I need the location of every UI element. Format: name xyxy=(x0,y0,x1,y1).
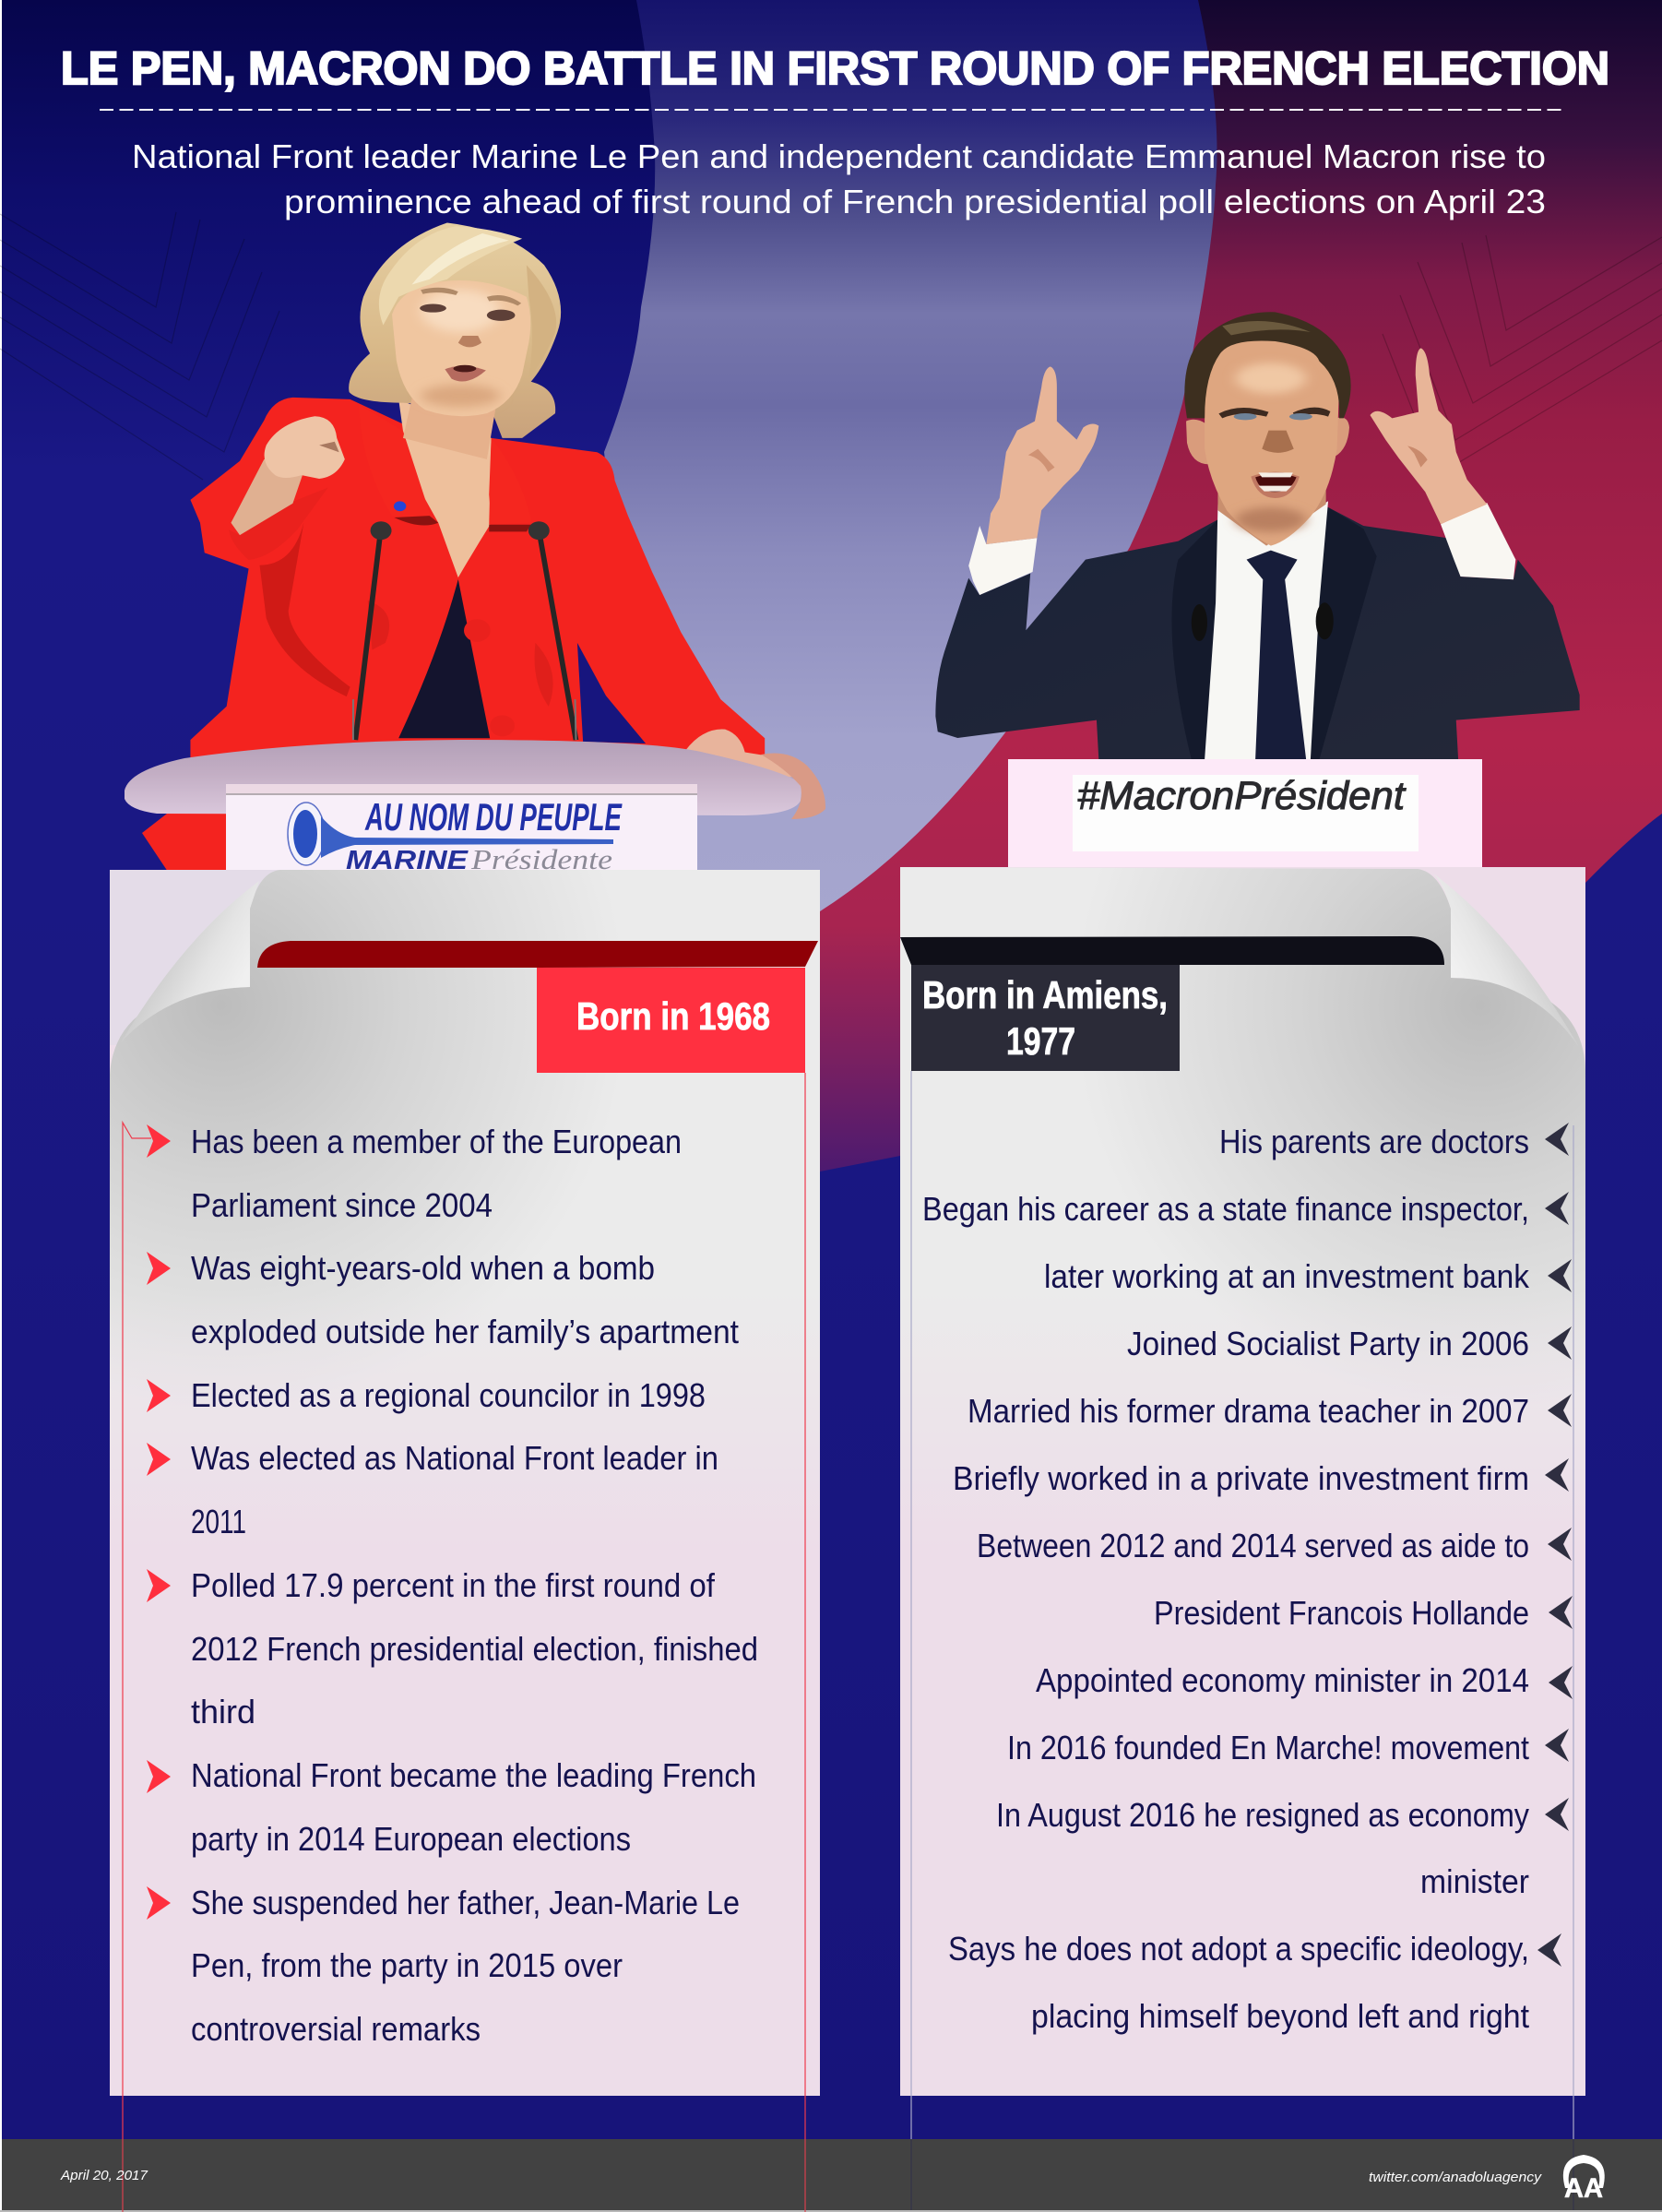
ears xyxy=(1186,418,1349,464)
biography text: In 2016 founded En Marche! movement xyxy=(1007,1729,1529,1766)
biography text: National Front became the leading French xyxy=(191,1756,756,1794)
biography text: 2012 French presidential election, finished xyxy=(191,1630,758,1668)
subtitle: prominence ahead of first round of French presidential poll elections on April 23 xyxy=(284,183,1546,220)
dark top xyxy=(398,579,490,738)
biography text: Briefly worked in a private investment firm xyxy=(953,1459,1529,1497)
biography text: third xyxy=(191,1693,255,1730)
biography text: Parliament since 2004 xyxy=(191,1186,493,1224)
biography text: Says he does not adopt a specific ideology, xyxy=(948,1930,1529,1968)
buttons xyxy=(464,619,491,642)
forearm xyxy=(231,459,303,535)
right cuff xyxy=(1441,503,1515,579)
facial features xyxy=(1218,408,1330,418)
biography text: Joined Socialist Party in 2006 xyxy=(1127,1325,1529,1362)
left hand xyxy=(986,366,1098,544)
subtitle: National Front leader Marine Le Pen and independent candidate Emmanuel Macron rise to xyxy=(132,137,1546,175)
biography text: placing himself beyond left and right xyxy=(1031,1997,1529,2035)
podium: Macron xyxy=(1008,759,1482,870)
portrait: Emmanuel Macron xyxy=(935,312,1580,760)
birthplace label xyxy=(911,965,1180,1071)
placard xyxy=(1073,775,1419,851)
biography text: Pen, from the party in 2015 over xyxy=(191,1946,623,1984)
hand on podium xyxy=(761,753,825,819)
biography text: In August 2016 he resigned as economy xyxy=(996,1796,1529,1834)
subtitle xyxy=(132,137,1546,220)
page curl xyxy=(1429,870,1579,1047)
facial features xyxy=(421,288,521,305)
lapel microphones xyxy=(1192,602,1334,641)
gap between body and sleeve xyxy=(577,643,646,743)
biography text: Was eight-years-old when a bomb xyxy=(191,1249,655,1287)
neck xyxy=(403,388,498,459)
podium slogan: AU NOM DU PEUPLE xyxy=(364,795,623,838)
jacket shadows xyxy=(260,523,350,696)
biography text: later working at an investment bank xyxy=(1044,1257,1530,1295)
panel: Macron biography xyxy=(900,867,1585,2212)
date of birth label: Born in 1968 xyxy=(576,994,770,1038)
biography text: His parents are doctors xyxy=(1219,1123,1529,1160)
biography text xyxy=(922,1123,1530,2035)
jacket xyxy=(190,398,765,777)
biography text: Between 2012 and 2014 served as aide to xyxy=(977,1527,1529,1564)
icon: Anadolu Agency logo: AA xyxy=(1564,2173,1603,2204)
guide lines xyxy=(123,1123,151,2212)
portrait: Marine Le Pen xyxy=(190,222,800,777)
biography text: Has been a member of the European xyxy=(191,1123,682,1160)
bullet arrows xyxy=(1537,1123,1573,1967)
biography text: 2011 xyxy=(191,1503,246,1540)
podium name: MARINE xyxy=(346,846,469,875)
date of birth label xyxy=(537,968,805,1073)
ribbon fold xyxy=(257,941,818,968)
neck xyxy=(1217,486,1326,546)
footer bar xyxy=(0,2139,1662,2212)
tie xyxy=(1247,551,1306,759)
paper xyxy=(900,867,1585,1568)
podium name: Présidente xyxy=(470,843,612,875)
face xyxy=(1205,335,1339,546)
dashed divider xyxy=(100,109,1564,111)
biography text: controversial remarks xyxy=(191,2010,481,2048)
biography text: party in 2014 European elections xyxy=(191,1820,631,1858)
biography text: Polled 17.9 percent in the first round of xyxy=(191,1566,716,1604)
shirt xyxy=(1205,501,1328,759)
ribbon fold xyxy=(900,936,1444,965)
biography text: Appointed economy minister in 2014 xyxy=(1036,1661,1529,1699)
guide lines xyxy=(911,1071,1573,2140)
hair xyxy=(1184,312,1351,418)
podium: Le Pen xyxy=(125,740,825,875)
biography text: She suspended her father, Jean-Marie Le xyxy=(191,1884,740,1921)
biography text: Married his former drama teacher in 2007 xyxy=(968,1392,1529,1430)
biography text xyxy=(191,1123,758,2048)
biography text: Was elected as National Front leader in xyxy=(191,1439,718,1477)
biography text: Began his career as a state finance inspector, xyxy=(922,1190,1529,1228)
page curl xyxy=(121,881,259,1042)
podium disc xyxy=(125,740,802,815)
paper xyxy=(110,870,820,1568)
panel: Le Pen biography xyxy=(110,870,820,2212)
hand xyxy=(265,416,345,479)
lower jacket xyxy=(142,807,231,872)
fringe xyxy=(379,226,522,325)
right hand xyxy=(685,730,800,777)
biography text: President Francois Hollande xyxy=(1154,1594,1529,1632)
podium front xyxy=(226,784,697,873)
lapels xyxy=(1171,507,1377,759)
biography text: exploded outside her family’s apartment xyxy=(191,1313,739,1350)
bullet arrows xyxy=(147,1124,171,1920)
hashtag: #MacronPrésident xyxy=(1077,774,1407,818)
hair back xyxy=(349,222,561,438)
icon: Anadolu Agency logo xyxy=(1563,2155,1605,2204)
date: April 20, 2017 xyxy=(60,2168,148,2183)
right hand xyxy=(1370,348,1487,524)
twitter handle: twitter.com/anadoluagency xyxy=(1369,2170,1543,2185)
birthplace label: Born in Amiens, xyxy=(922,973,1168,1017)
microphones xyxy=(353,521,576,740)
podium name xyxy=(346,843,612,875)
lapels xyxy=(359,405,432,521)
face xyxy=(392,280,530,416)
biography text: Elected as a regional councilor in 1998 xyxy=(191,1376,706,1414)
title: LE PEN, MACRON DO BATTLE IN FIRST ROUND OF FRENCH ELECTION xyxy=(61,42,1609,94)
emblem: flame logo xyxy=(288,803,613,865)
pin xyxy=(394,501,406,511)
birthplace label: 1977 xyxy=(1006,1019,1075,1063)
left cuff xyxy=(968,526,1037,595)
biography text: minister xyxy=(1420,1862,1529,1900)
chest xyxy=(398,399,492,577)
suit xyxy=(935,507,1580,760)
